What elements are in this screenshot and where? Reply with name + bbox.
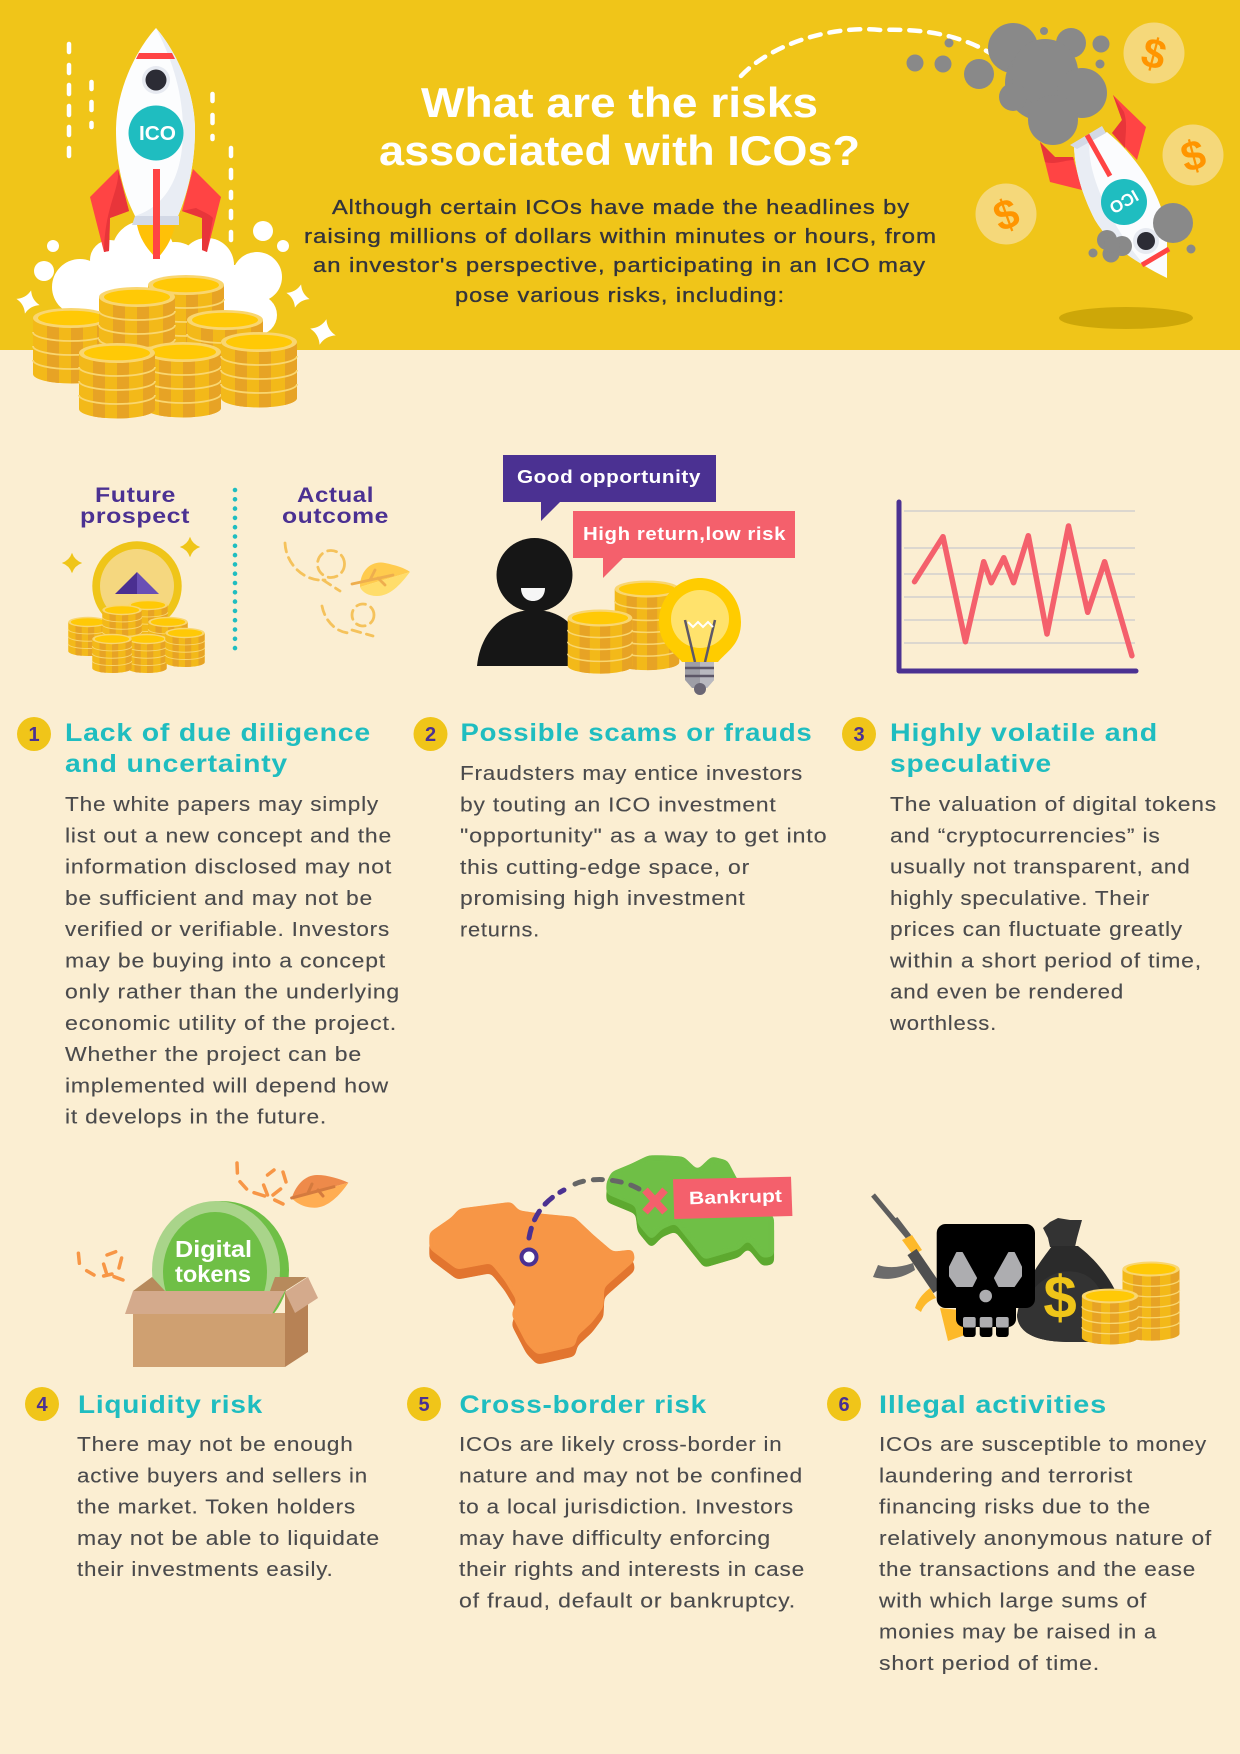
- person: [477, 538, 590, 666]
- body 3: and even be rendered: [890, 982, 1124, 1004]
- section 2: possible scams or frauds: [414, 717, 827, 941]
- heading 5: Cross-border risk: [460, 1391, 707, 1419]
- body 6: the transactions and the ease: [879, 1559, 1196, 1581]
- badge 4: 4: [36, 1394, 48, 1416]
- body 6: relatively anonymous nature of: [879, 1528, 1212, 1550]
- bubble: good opportunity: Good opportunity: [517, 467, 701, 487]
- body 2: returns.: [460, 919, 540, 941]
- intro text: raising millions of dollars within minutes or hours, from: [304, 226, 937, 248]
- body 2: promising high investment: [460, 888, 746, 910]
- badge 2: [414, 717, 448, 751]
- badge 5: [407, 1387, 441, 1421]
- body 5: nature and may not be confined: [459, 1465, 803, 1487]
- dollar coins: $: [1176, 130, 1210, 181]
- badge 4: [25, 1387, 59, 1421]
- intro text: [304, 197, 937, 307]
- body 2: by touting an ICO investment: [460, 794, 776, 816]
- money bag: [1017, 1218, 1115, 1342]
- money bag: $: [1043, 1264, 1077, 1331]
- badge 1: 1: [28, 724, 40, 746]
- heading 3: [890, 719, 1158, 778]
- badge 5: 5: [418, 1394, 430, 1416]
- body 4: [77, 1434, 380, 1581]
- intro text: Although certain ICOs have made the headlines by: [332, 197, 910, 219]
- label: actual outcome: [282, 484, 389, 528]
- route: [529, 1180, 639, 1238]
- bubble: high return: [573, 511, 795, 578]
- body 2: "opportunity" as a way to get into: [460, 826, 827, 848]
- title: [379, 79, 860, 174]
- illustration 2: scammer with speech bubbles: [477, 455, 795, 695]
- body 1: implemented will depend how: [65, 1075, 389, 1097]
- flight path: [741, 29, 990, 76]
- illustration 6: illegal activities: [873, 1195, 1180, 1348]
- cross mark: [645, 1190, 665, 1212]
- chart axes: [899, 502, 1136, 671]
- label: actual outcome: outcome: [282, 505, 389, 528]
- header band: [0, 0, 1240, 350]
- medal and coins: [62, 537, 205, 675]
- illustration 4: digital tokens in a box: [78, 1163, 348, 1367]
- body 3: worthless.: [889, 1013, 997, 1035]
- coins: [568, 580, 679, 678]
- heading 3: speculative: [890, 750, 1052, 778]
- heading 1: Lack of due diligence: [65, 719, 371, 747]
- badge 3: 3: [853, 724, 865, 746]
- dollar coins: [976, 22, 1224, 244]
- body 3: highly speculative. Their: [890, 888, 1150, 910]
- title: What are the risks: [421, 79, 818, 126]
- body 1: verified or verifiable. Investors: [65, 919, 390, 941]
- heading 3: Highly volatile and: [890, 719, 1158, 747]
- body 2: [460, 763, 827, 941]
- body 4: the market. Token holders: [77, 1496, 356, 1518]
- bankrupt tag: [673, 1177, 792, 1219]
- body 1: may be buying into a concept: [65, 950, 386, 972]
- body 5: may have difficulty enforcing: [459, 1528, 771, 1550]
- body 1: list out a new concept and the: [65, 825, 392, 847]
- speed dashes: [69, 44, 231, 240]
- section 1: lack of due diligence: [17, 717, 400, 1128]
- token: tokens: [175, 1261, 251, 1287]
- body 4: their investments easily.: [77, 1559, 334, 1581]
- heading 6: Illegal activities: [879, 1391, 1107, 1419]
- badge 2: 2: [425, 724, 436, 746]
- dotted divider: [233, 490, 237, 657]
- coin stacks: [33, 275, 297, 423]
- section 6: illegal activities: [827, 1387, 1212, 1675]
- rocket: ICO: [139, 123, 176, 145]
- illustration 1: future prospect vs actual outcome: [62, 484, 410, 675]
- smoke: [906, 23, 1196, 262]
- label: future prospect: Future: [95, 484, 176, 507]
- dollar coins: $: [987, 188, 1025, 241]
- heading 1: [65, 719, 371, 778]
- body 1: [65, 794, 400, 1128]
- body 1: it develops in the future.: [65, 1106, 327, 1128]
- body 1: be sufficient and may not be: [65, 888, 373, 910]
- skull: [937, 1224, 1035, 1337]
- intro text: pose various risks, including:: [455, 285, 785, 307]
- body 6: laundering and terrorist: [879, 1465, 1133, 1487]
- body 6: ICOs are susceptible to money: [879, 1434, 1207, 1456]
- badge 3: [842, 717, 876, 751]
- body 4: active buyers and sellers in: [77, 1465, 368, 1487]
- origin pin: [522, 1250, 536, 1264]
- body 6: monies may be raised in a: [879, 1622, 1157, 1644]
- label: future prospect: [80, 484, 190, 528]
- body 1: Whether the project can be: [65, 1044, 362, 1066]
- green land: [608, 1157, 773, 1266]
- falling leaf trail: [285, 543, 410, 636]
- ground shadow: [1059, 307, 1193, 329]
- badge 6: [827, 1387, 861, 1421]
- intro text: an investor's perspective, participating in an ICO may: [313, 255, 926, 277]
- body 3: within a short period of time,: [889, 950, 1202, 972]
- illustration 3: volatile line chart: [899, 502, 1136, 671]
- cloud: [13, 221, 339, 348]
- body 3: and “cryptocurrencies” is: [890, 825, 1161, 847]
- body 6: short period of time.: [879, 1653, 1100, 1675]
- badge 1: [17, 717, 51, 751]
- body 4: may not be able to liquidate: [77, 1528, 380, 1550]
- dashes and leaf: [78, 1163, 348, 1280]
- body 5: ICOs are likely cross-border in: [459, 1434, 782, 1456]
- body 2: Fraudsters may entice investors: [460, 763, 803, 785]
- body 2: this cutting-edge space, or: [460, 857, 750, 879]
- label: future prospect: prospect: [80, 505, 190, 528]
- title: associated with ICOs?: [379, 127, 860, 174]
- rocket: [90, 28, 221, 259]
- body 5: of fraud, default or bankruptcy.: [459, 1590, 796, 1612]
- body 1: economic utility of the project.: [65, 1013, 397, 1035]
- body 5: to a local jurisdiction. Investors: [459, 1496, 794, 1518]
- fallen rocket: [1040, 95, 1169, 278]
- body 6: financing risks due to the: [879, 1496, 1151, 1518]
- dollar coins: $: [1137, 28, 1171, 79]
- price line: [914, 526, 1132, 656]
- body 4: There may not be enough: [77, 1434, 354, 1456]
- africa: [431, 1203, 633, 1363]
- token: Digital: [175, 1236, 252, 1262]
- heading 2: Possible scams or frauds: [460, 719, 812, 747]
- body 5: [459, 1434, 805, 1612]
- cardboard box: [125, 1277, 318, 1367]
- heading 4: Liquidity risk: [78, 1391, 263, 1419]
- illustration 5: cross-border map: [431, 1157, 792, 1363]
- heading 1: and uncertainty: [65, 750, 288, 778]
- illustration: crashing rocket: [741, 22, 1224, 329]
- body 5: their rights and interests in case: [459, 1559, 805, 1581]
- coins: [1082, 1262, 1180, 1348]
- body 3: The valuation of digital tokens: [890, 794, 1217, 816]
- body 6: with which large sums of: [878, 1590, 1147, 1612]
- badge 6: 6: [838, 1394, 850, 1416]
- body 1: The white papers may simply: [65, 794, 379, 816]
- section 3: highly volatile and speculative: [842, 717, 1217, 1035]
- body 3: usually not transparent, and: [890, 856, 1191, 878]
- bubble: high return: High return,low risk: [583, 524, 787, 544]
- bankrupt tag: Bankrupt: [689, 1186, 782, 1208]
- body 6: [878, 1434, 1212, 1675]
- body 1: only rather than the underlying: [65, 982, 400, 1004]
- token: [152, 1201, 289, 1339]
- light bulb: [659, 578, 741, 695]
- illustration: rocket launch with coins: [13, 28, 339, 423]
- fallen rocket: ICO: [1106, 186, 1142, 217]
- bubble: good opportunity: [503, 455, 716, 521]
- rifle: [873, 1195, 965, 1341]
- section 5: cross-border risk: [407, 1387, 805, 1612]
- body 3: [889, 794, 1217, 1035]
- body 3: prices can fluctuate greatly: [890, 919, 1183, 941]
- body 1: information disclosed may not: [65, 856, 392, 878]
- section 4: liquidity risk: [25, 1387, 380, 1581]
- label: actual outcome: Actual: [297, 484, 374, 507]
